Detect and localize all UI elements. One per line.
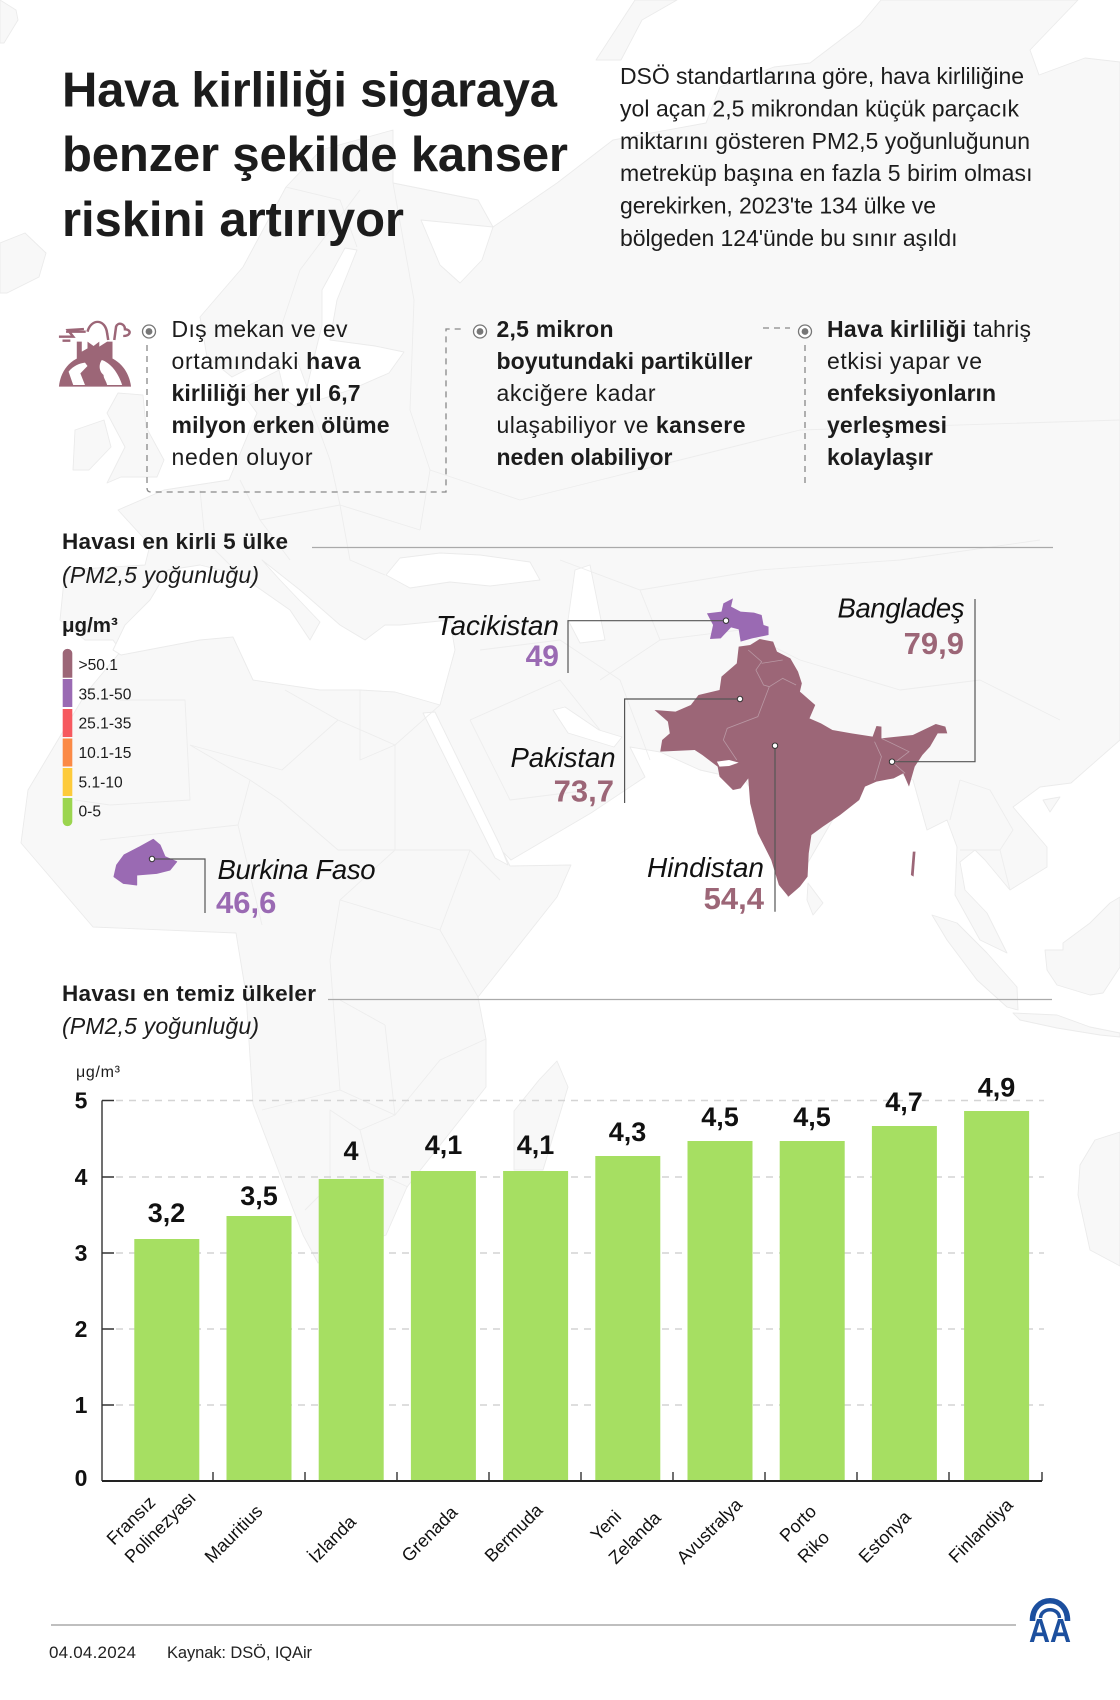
intro text: DSÖ standartlarına göre, hava kirliliğine: [620, 63, 1024, 89]
column 3: irritation: [763, 316, 1031, 483]
title: [62, 64, 568, 247]
category labels: Yeni: [587, 1506, 625, 1545]
value labels: 4,3: [609, 1117, 646, 1147]
bar chart: [75, 1064, 1044, 1568]
callout: India: [647, 743, 778, 916]
intro text: yol açan 2,5 mikrondan küçük parçacık: [620, 96, 1020, 122]
callout: Pakistan: [510, 696, 743, 809]
category labels: Porto: [776, 1501, 820, 1546]
value labels: 4,1: [517, 1130, 554, 1160]
heading: cleanest: (PM2,5 yoğunluğu): [62, 1013, 259, 1039]
icon: factory over globe: [59, 322, 131, 387]
column 2: particles: akciğere kadar: [496, 380, 656, 406]
heading: most polluted: [62, 529, 1053, 588]
column 3: irritation: Hava kirliliği tahriş: [827, 316, 1031, 342]
category labels: Grenada: [398, 1501, 462, 1566]
column 1: premature deaths: ortamındaki hava: [172, 348, 361, 374]
title: benzer şekilde kanser: [62, 128, 568, 182]
callout: India: Hindistan: [647, 852, 764, 883]
callout: Tajikistan: [436, 610, 729, 673]
callout: Tajikistan: Tacikistan: [436, 610, 559, 641]
legend: 25.1-35: [78, 716, 132, 733]
footer date and source: Kaynak: DSÖ, IQAir: [167, 1644, 312, 1662]
category labels: Mauritius: [201, 1501, 266, 1567]
value labels: 4,1: [425, 1130, 462, 1160]
category labels: Polinezyası: [121, 1488, 200, 1567]
heading: most polluted: (PM2,5 yoğunluğu): [62, 562, 259, 588]
callout: Burkina Faso: [149, 854, 376, 920]
value labels: 4,5: [701, 1102, 739, 1132]
chart axes and grid: 0: [75, 1465, 87, 1491]
heading: cleanest: [62, 981, 1052, 1039]
chart axes and grid: 3: [75, 1240, 87, 1266]
column 2: particles: 2,5 mikron: [496, 316, 614, 342]
callout: Bangladesh: Bangladeş: [838, 593, 965, 624]
value labels: 4,7: [885, 1087, 923, 1117]
category labels: Finlandiya: [945, 1494, 1018, 1567]
intro text: miktarını gösteren PM2,5 yoğunluğunun: [620, 128, 1030, 154]
callout: Burkina Faso: Burkina Faso: [218, 854, 376, 885]
legend: μg/m³: [62, 614, 118, 637]
legend: 35.1-50: [78, 686, 132, 703]
legend: 10.1-15: [78, 745, 132, 762]
column 2: particles: boyutundaki partiküller: [496, 348, 753, 374]
column 1: premature deaths: Dış mekan ve ev: [172, 316, 348, 342]
country: Burkina Faso shape: [114, 839, 177, 885]
column 3: irritation: enfeksiyonların: [827, 380, 996, 406]
column 2: particles: ulaşabiliyor ve kansere: [496, 412, 746, 438]
legend: 0-5: [78, 804, 101, 821]
chart axes and grid: [75, 1064, 1044, 1491]
title: Hava kirliliği sigaraya: [62, 64, 558, 118]
logo: AA: [1029, 1601, 1071, 1649]
legend: [62, 614, 132, 826]
callout: Burkina Faso: 46,6: [216, 885, 276, 920]
value labels: 4,9: [978, 1073, 1015, 1103]
heading: cleanest: Havası en temiz ülkeler: [62, 981, 316, 1006]
footer line: [51, 1624, 1016, 1626]
chart axes and grid: 5: [75, 1088, 88, 1114]
bullet 1: [142, 325, 156, 338]
category labels: Zelanda: [605, 1507, 666, 1568]
category labels: Bermuda: [481, 1499, 547, 1566]
category labels: [103, 1488, 1018, 1568]
value labels: [148, 1073, 1015, 1228]
callout: Bangladesh: [838, 593, 975, 764]
background world map: [0, 0, 1120, 1266]
column 3: irritation: etkisi yapar ve: [827, 348, 982, 374]
intro text: metreküp başına en fazla 5 birim olması: [620, 160, 1032, 186]
category labels: Fransız: [103, 1492, 159, 1549]
chart axes and grid: 2: [75, 1316, 87, 1342]
column 1: premature deaths: milyon erken ölüme: [172, 412, 390, 438]
intro text: gerekirken, 2023'te 134 ülke ve: [620, 192, 936, 218]
column 1: premature deaths: kirliliği her yıl 6,7: [172, 380, 360, 406]
value labels: 4: [343, 1136, 359, 1166]
column 3: irritation: kolaylaşır: [827, 444, 933, 470]
category labels: Riko: [794, 1527, 833, 1567]
callout: Bangladesh: 79,9: [904, 626, 964, 661]
column 3: irritation: yerleşmesi: [827, 412, 947, 438]
chart axes and grid: 1: [75, 1392, 88, 1418]
column 1: premature deaths: neden oluyor: [172, 444, 313, 470]
title: riskini artırıyor: [62, 193, 404, 247]
bullet 3: [798, 325, 812, 338]
callout: Pakistan: Pakistan: [510, 742, 616, 773]
value labels: 4,5: [793, 1102, 831, 1132]
bars: [134, 1111, 1029, 1481]
callout: Tajikistan: 49: [526, 640, 559, 673]
category labels: Avustralya: [673, 1494, 747, 1568]
country: Tajikistan shape: [707, 598, 769, 642]
column 1: premature deaths: [142, 316, 464, 492]
column 2: particles: [474, 316, 753, 470]
value labels: 3,2: [148, 1198, 185, 1228]
category labels: Estonya: [855, 1506, 916, 1567]
value labels: 3,5: [240, 1181, 278, 1211]
legend: >50.1: [78, 657, 118, 674]
chart axes and grid: 4: [75, 1164, 88, 1190]
intro text: [620, 63, 1032, 251]
callout: India: 54,4: [704, 881, 765, 916]
category labels: İzlanda: [305, 1511, 361, 1567]
intro text: bölgeden 124'ünde bu sınır aşıldı: [620, 225, 958, 251]
heading: most polluted: Havası en kirli 5 ülke: [62, 529, 288, 554]
footer date and source: 04.04.2024: [49, 1643, 136, 1662]
callout: Pakistan: 73,7: [554, 774, 614, 809]
column 2: particles: neden olabiliyor: [496, 444, 673, 470]
legend: 5.1-10: [78, 774, 123, 791]
footer date and source: [49, 1643, 312, 1662]
country: Pakistan and India shape: [654, 639, 947, 897]
chart axes and grid: μg/m³: [76, 1064, 121, 1081]
bullet 2: [474, 325, 486, 338]
logo: AA: AA: [1029, 1612, 1071, 1649]
